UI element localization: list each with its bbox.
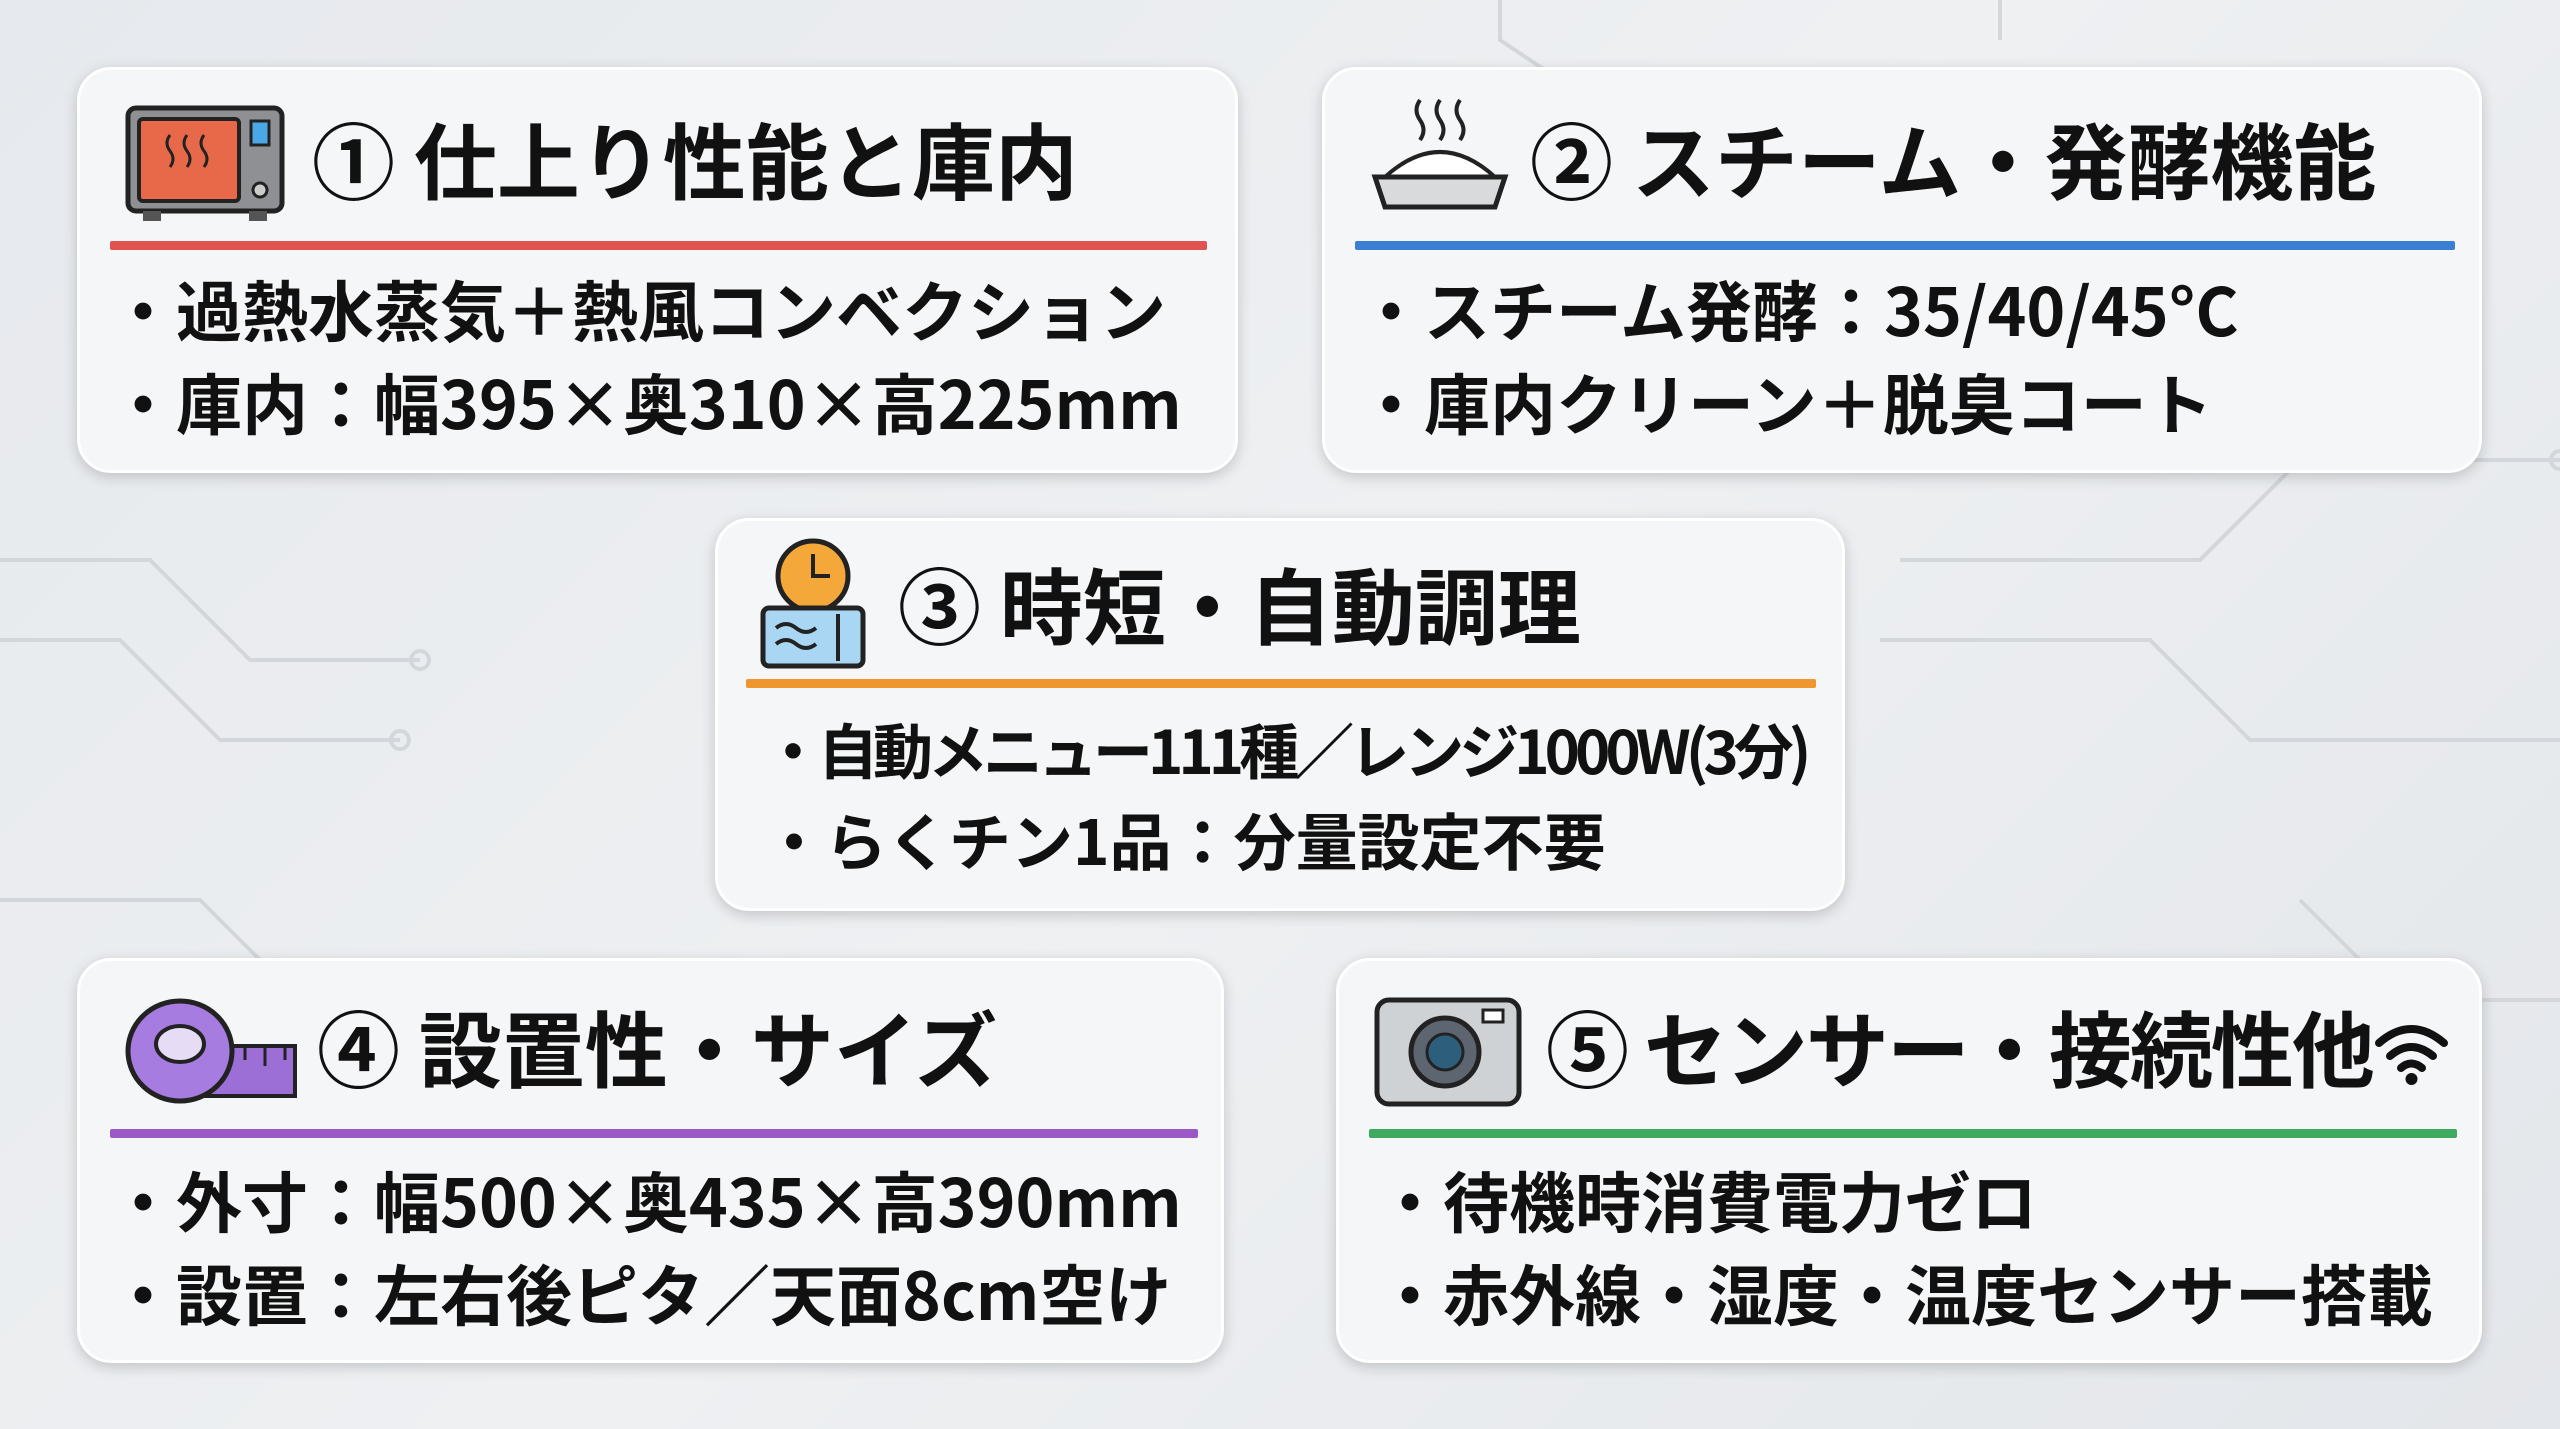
icon: steaming dish (1372, 98, 1508, 210)
icon: camera (1374, 998, 1522, 1106)
panel: センサー・接続性他: ・赤外線・湿度・温度センサー搭載 (1377, 1244, 2433, 1340)
icon: clock and microwave (760, 538, 866, 668)
heading: ③ 時短・自動調理 (898, 542, 1581, 662)
panel: 設置性・サイズ (77, 958, 1224, 1363)
panel: スチーム・発酵機能: ・庫内クリーン＋脱臭コート (1358, 353, 2213, 449)
panel: 仕上り性能と庫内: ・庫内：幅395×奥310×高225mm (110, 353, 1182, 449)
bullets: ・外寸：幅500×奥435×高390mm (110, 1151, 1182, 1247)
heading: ⑤ センサー・接続性他 (1546, 985, 2373, 1105)
heading: ② スチーム・発酵機能 (1530, 97, 2376, 217)
icon: wifi (2375, 1025, 2448, 1085)
bullets: ・待機時消費電力ゼロ (1377, 1151, 2037, 1247)
icon: measuring tape (126, 998, 297, 1104)
panel: 時短・自動調理: ・らくチン1品：分量設定不要 (763, 793, 1606, 883)
panel: 設置性・サイズ: ・設置：左右後ピタ／天面8cm空け (110, 1244, 1171, 1340)
bullets: ・過熱水蒸気＋熱風コンベクション (110, 260, 1166, 356)
panel: センサー・接続性他 (1336, 958, 2482, 1363)
heading: ① 仕上り性能と庫内 (312, 97, 1078, 217)
bullets: ・自動メニュー111種／レンジ1000W(3分) (763, 705, 1806, 792)
panel: 仕上り性能と庫内 (77, 67, 1238, 473)
icon: oven (126, 106, 284, 221)
heading: ④ 設置性・サイズ (317, 985, 997, 1105)
panel: スチーム・発酵機能 (1322, 67, 2482, 473)
panel: 時短・自動調理 (715, 518, 1845, 911)
bullets: ・スチーム発酵：35/40/45°C (1358, 260, 2239, 356)
